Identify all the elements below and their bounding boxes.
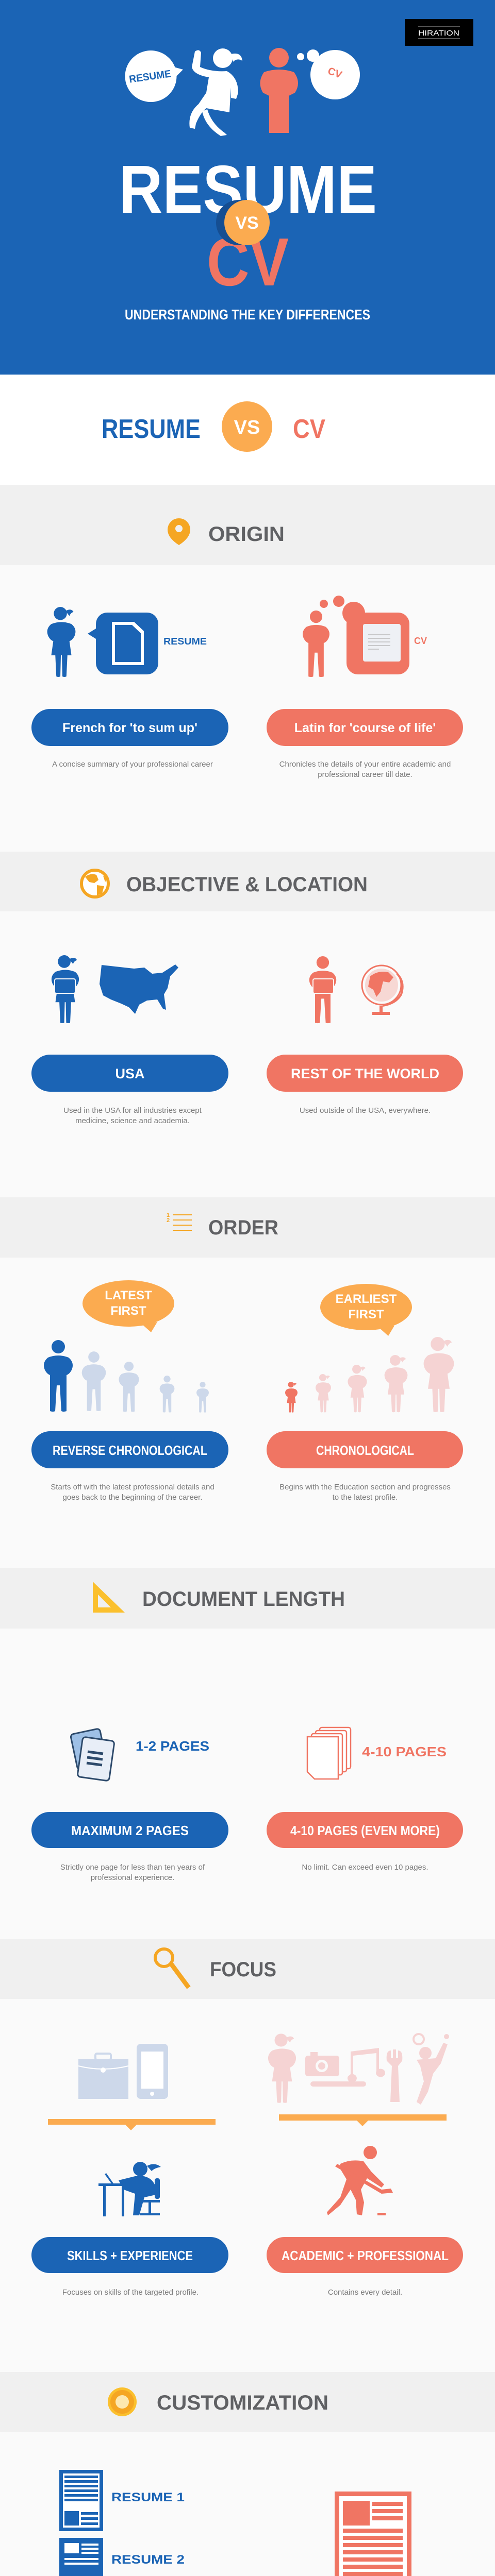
section header: customization — [0, 2372, 495, 2432]
intro row: resume vs cv: CV — [293, 414, 325, 444]
section header: origin: ORIGIN — [208, 523, 285, 546]
title: RESUME: RESUME — [119, 151, 377, 227]
pill: chronological: CHRONOLOGICAL — [316, 1443, 414, 1458]
length descriptions — [60, 1863, 428, 1882]
customization: single cv — [335, 2492, 411, 2576]
order descriptions: Begins with the Education section and progresses — [279, 1483, 451, 1492]
objective descriptions: medicine, science and academia. — [75, 1116, 190, 1125]
origin descriptions — [52, 760, 451, 779]
customization: resume documents: RESUME 2 — [111, 2553, 185, 2567]
intro row: resume vs cv: VS — [234, 417, 260, 438]
objective descriptions: Used in the USA for all industries except — [63, 1106, 202, 1115]
order descriptions: goes back to the beginning of the career. — [62, 1493, 203, 1502]
bubble: earliest first: EARLIEST — [336, 1292, 397, 1306]
icon: 4-10 pages: 4-10 PAGES — [362, 1744, 447, 1759]
bubble: latest first: FIRST — [110, 1304, 146, 1318]
intro row: resume vs cv: RESUME — [102, 414, 201, 444]
pill: academic + professional: ACADEMIC + PROFESSIONAL — [282, 2248, 449, 2263]
pill: academic + professional — [267, 2237, 463, 2273]
focus: resume icons — [48, 2044, 216, 2130]
pill: USA: USA — [115, 1066, 145, 1081]
illustration: cv man with thought bubble: CV — [326, 65, 344, 81]
objective descriptions: Used outside of the USA, everywhere. — [300, 1106, 431, 1115]
bubble: earliest first — [320, 1284, 412, 1336]
objective descriptions — [63, 1106, 431, 1125]
focus: resume desk figure — [98, 2162, 161, 2216]
pill: reverse chronological: REVERSE CHRONOLOGICAL — [53, 1443, 207, 1458]
section header: order: ORDER — [208, 1216, 278, 1239]
pill: REST OF THE WORLD: REST OF THE WORLD — [291, 1066, 439, 1081]
vs badge: VS — [235, 213, 259, 233]
origin descriptions: professional career till date. — [318, 770, 412, 779]
pill: reverse chronological — [31, 1431, 228, 1468]
pill: maximum 2 pages: MAXIMUM 2 PAGES — [71, 1823, 189, 1838]
pill: skills + experience: SKILLS + EXPERIENCE — [67, 2248, 193, 2263]
section header: focus: FOCUS — [210, 1958, 276, 1981]
icon: 1-2 pages — [70, 1728, 209, 1781]
illustration: resume girl with speech bubble — [125, 48, 242, 136]
objective: usa icons — [52, 955, 178, 1023]
order descriptions: to the latest profile. — [333, 1493, 398, 1502]
pill: French for 'to sum up' — [31, 709, 228, 746]
pill: Latin for 'course of life' — [267, 709, 463, 746]
focus descriptions — [62, 2288, 402, 2297]
section header: customization: CUSTOMIZATION — [157, 2392, 328, 2414]
section header: focus — [0, 1939, 495, 1999]
figures: chronological — [285, 1337, 454, 1413]
focus descriptions: Contains every detail. — [328, 2288, 402, 2297]
origin: cv icon: CV — [414, 636, 427, 646]
section header: document length: DOCUMENT LENGTH — [142, 1588, 345, 1611]
origin: resume icon — [47, 607, 207, 677]
length descriptions: Strictly one page for less than ten years of — [60, 1863, 205, 1872]
vs badge — [216, 200, 270, 245]
title: CV: CV — [207, 224, 289, 300]
section header: objective & location: OBJECTIVE & LOCATION — [126, 873, 368, 896]
section header: order — [0, 1197, 495, 1258]
intro row: resume vs cv — [0, 375, 495, 485]
pill: 4-10 pages (even more): 4-10 PAGES (EVEN MORE) — [290, 1823, 440, 1838]
section header: order: 1 — [167, 1212, 170, 1218]
pill: chronological — [267, 1431, 463, 1468]
illustration: cv man with thought bubble — [260, 48, 360, 133]
pill: maximum 2 pages — [31, 1812, 228, 1848]
illustration: resume girl with speech bubble: RESUME — [128, 68, 172, 86]
pill: skills + experience — [31, 2237, 228, 2273]
focus descriptions: Focuses on skills of the targeted profile. — [62, 2288, 199, 2297]
focus: cv hockey figure — [327, 2146, 393, 2215]
pill: REST OF THE WORLD — [267, 1055, 463, 1092]
section header: order: 2 — [167, 1217, 170, 1224]
logo: HIRATION: HIRATION — [418, 29, 459, 38]
length descriptions: professional experience. — [91, 1873, 174, 1882]
origin descriptions: A concise summary of your professional career — [52, 760, 213, 769]
section header: origin — [0, 485, 495, 565]
logo: HIRATION — [405, 19, 473, 46]
customization: resume documents — [59, 2470, 185, 2576]
objective: world icons — [309, 956, 403, 1023]
length descriptions: No limit. Can exceed even 10 pages. — [302, 1863, 428, 1872]
origin: resume icon: RESUME — [163, 636, 207, 647]
pill: USA — [31, 1055, 228, 1092]
icon: 1-2 pages: 1-2 PAGES — [136, 1738, 209, 1754]
origin: cv icon — [303, 596, 427, 677]
pill: French for 'to sum up': French for 'to sum up' — [62, 721, 197, 735]
subtitle: UNDERSTANDING THE KEY DIFFERENCES — [125, 307, 370, 323]
bubble: earliest first: FIRST — [348, 1308, 384, 1321]
icon: 4-10 pages — [307, 1727, 447, 1779]
customization: resume documents: RESUME 1 — [111, 2490, 185, 2504]
pill: 4-10 pages (even more) — [267, 1812, 463, 1848]
section header: document length — [0, 1568, 495, 1629]
bubble: latest first — [82, 1280, 174, 1332]
focus: cv pink icons — [268, 2033, 449, 2126]
order descriptions: Starts off with the latest professional details and — [51, 1483, 214, 1492]
figures: reverse chronological — [44, 1340, 209, 1413]
order descriptions — [51, 1483, 451, 1502]
section header: objective & location — [0, 852, 495, 911]
pill: Latin for 'course of life': Latin for 'course of life' — [294, 721, 436, 735]
bubble: latest first: LATEST — [105, 1289, 152, 1302]
origin descriptions: Chronicles the details of your entire academic and — [279, 760, 451, 769]
header background — [0, 0, 495, 375]
